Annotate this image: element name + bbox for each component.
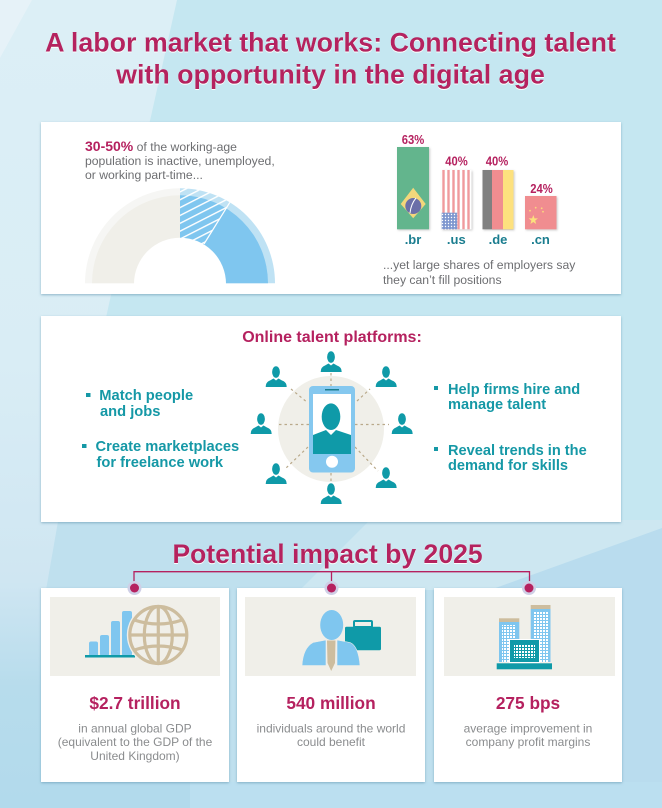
left bullets: for freelance work [96, 455, 224, 471]
card: profit margins [434, 581, 622, 782]
right bullets [434, 382, 587, 474]
panel: inactive population [41, 122, 621, 294]
intro text: population is inactive, unemployed, [85, 154, 275, 168]
left bullets: Match people [99, 388, 193, 404]
intro text [85, 138, 275, 182]
card: individuals: individuals around the world [257, 722, 405, 736]
card: profit margins: average improvement in [464, 722, 592, 736]
icon: bars and globe [85, 604, 190, 666]
flag bar: China 24%: .cn [531, 232, 550, 247]
flag bar: United States 40% [442, 154, 472, 247]
flag bar: United States 40%: .us [447, 232, 466, 247]
title [45, 28, 616, 90]
panel: online talent platforms [41, 316, 622, 782]
flag bar: Germany 40% [482, 154, 514, 247]
card: GDP: United Kingdom) [90, 749, 180, 763]
impact heading: Potential impact by 2025 [172, 539, 483, 569]
flag bar: Brazil 63%: 63% [402, 132, 425, 147]
intro text: or working part-time... [85, 168, 203, 182]
right bullets: manage talent [448, 397, 546, 413]
stat: individuals: 540 million [286, 693, 376, 713]
flag bar: Germany 40%: .de [489, 232, 507, 247]
flag bar: Brazil 63% [397, 132, 429, 247]
flag bar: Germany 40%: 40% [486, 154, 509, 169]
stat: GDP: $2.7 trillion [89, 693, 181, 713]
flag bar: China 24%: 24% [530, 181, 553, 196]
card: individuals [237, 581, 425, 782]
icon: person with briefcase [302, 610, 381, 671]
flag bar: United States 40%: 40% [445, 154, 468, 169]
semicircle chart [85, 188, 275, 284]
stat: bps: 275 bps [496, 693, 560, 713]
card: GDP: in annual global GDP [78, 722, 192, 736]
phone [309, 386, 355, 472]
people icons [251, 351, 413, 504]
employers text [383, 258, 576, 287]
icon: buildings [497, 605, 552, 669]
employers text: ...yet large shares of employers say [383, 258, 576, 272]
connector lines [134, 572, 530, 586]
right bullets: Reveal trends in the [448, 443, 587, 459]
title: with opportunity in the digital age [115, 60, 545, 90]
network diagram [251, 351, 413, 504]
employers text: they can’t fill positions [383, 273, 502, 287]
card: profit margins: company profit margins [466, 735, 590, 749]
intro text: 30-50% of the working-age [85, 138, 237, 154]
flag bar: Brazil 63%: .br [405, 232, 421, 247]
right bullets: Help firms hire and [448, 382, 580, 398]
card: individuals: could benefit [297, 735, 366, 749]
title: A labor market that works: Connecting talent [45, 28, 616, 58]
card: GDP: (equivalent to the GDP of the [58, 735, 213, 749]
flag bar: China 24% [525, 181, 556, 247]
card: GDP [41, 581, 229, 782]
left bullets: and jobs [100, 404, 160, 420]
platforms heading: Online talent platforms: [242, 329, 422, 346]
right bullets: demand for skills [448, 458, 568, 474]
left bullets: Create marketplaces [96, 439, 239, 455]
left bullets [82, 388, 239, 471]
